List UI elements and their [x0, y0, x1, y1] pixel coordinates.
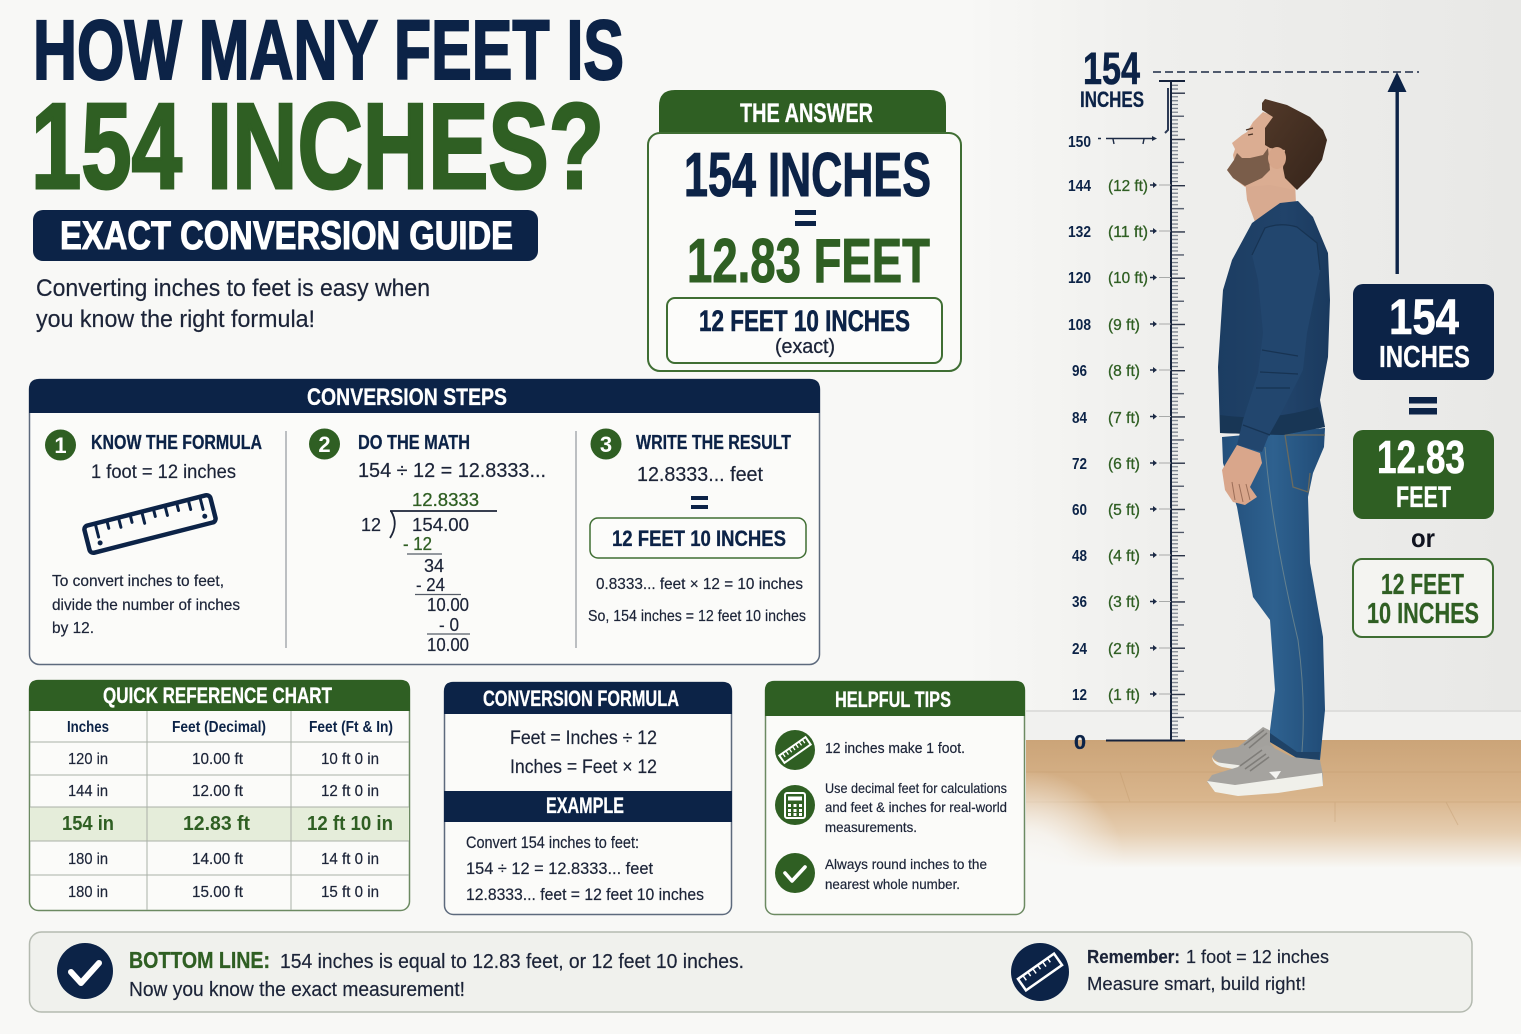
beard	[1227, 148, 1270, 186]
table rows: 10 ft 0 in	[321, 751, 379, 768]
long division: 10.00	[427, 634, 469, 655]
table rows: 144 in	[68, 783, 108, 800]
scale marks: (10 ft)	[1108, 270, 1148, 287]
callout: 12.83 feet: FEET	[1396, 481, 1451, 514]
scale marks: (1 ft)	[1108, 687, 1140, 704]
long division: 12.8333	[412, 489, 479, 510]
steps header	[29, 379, 820, 413]
scale marks	[1068, 178, 1171, 704]
sleeve	[1237, 225, 1320, 452]
scale marks: (8 ft)	[1108, 363, 1140, 380]
bottom line text: Now you know the exact measurement!	[129, 979, 465, 1001]
scale marks: (4 ft)	[1108, 548, 1140, 565]
step 2 badge: 2	[318, 432, 331, 457]
scale marks: (7 ft)	[1108, 410, 1140, 427]
long division: - 12	[403, 533, 432, 554]
long division: 154.00	[412, 514, 469, 535]
table rows: 14 ft 0 in	[321, 851, 379, 868]
eye and nose detail	[1246, 128, 1253, 135]
panel: bottom line	[30, 932, 1472, 1012]
remember text	[1087, 946, 1329, 994]
column headers: Inches	[67, 719, 109, 736]
scale marks: 108	[1068, 317, 1091, 334]
tip 2: measurements.	[825, 819, 917, 835]
step 3 result box	[590, 518, 806, 558]
long division: - 24	[416, 574, 445, 595]
icon: calculator	[775, 785, 815, 825]
scale marks: 120	[1068, 270, 1091, 287]
table rows: 180 in	[68, 884, 108, 901]
highlighted values: 154 in	[62, 813, 114, 835]
column headers: Feet (Ft & In)	[309, 719, 393, 736]
step 1 explanation: by 12.	[52, 620, 94, 637]
or label: or	[1411, 523, 1435, 553]
icon: ruler	[775, 730, 815, 770]
tip 3: nearest whole number.	[825, 876, 960, 892]
step 3 note	[588, 576, 806, 625]
hair	[1262, 99, 1327, 190]
step 3 title: WRITE THE RESULT	[636, 431, 791, 454]
icon: check badge	[57, 943, 113, 999]
top label 154 inches	[1080, 43, 1144, 112]
step 1 badge	[45, 430, 76, 460]
scale marks: 96	[1072, 363, 1087, 380]
callout: 12.83 feet: 12.83	[1377, 431, 1465, 483]
exact box	[667, 298, 942, 363]
scale marks: (5 ft)	[1108, 502, 1140, 519]
example text: 12.8333... feet = 12 feet 10 inches	[466, 886, 704, 904]
tip 1: 12 inches make 1 foot.	[825, 741, 965, 757]
scale marks: 24	[1072, 641, 1087, 658]
example text: Convert 154 inches to feet:	[466, 834, 639, 852]
step 1 title: KNOW THE FORMULA	[91, 431, 262, 454]
tip 3	[825, 856, 987, 892]
long division	[361, 489, 497, 655]
panel: helpful tips	[765, 681, 1025, 914]
answer heading: THE ANSWER	[740, 98, 873, 128]
tips header	[765, 681, 1025, 716]
column headers: Feet (Decimal)	[172, 719, 266, 736]
answer inches: 154 INCHES	[684, 141, 931, 210]
intro text: Converting inches to feet is easy when	[36, 275, 430, 302]
tips heading: HELPFUL TIPS	[835, 687, 951, 712]
formulas: Inches = Feet × 12	[510, 757, 657, 778]
equals sign	[691, 496, 708, 509]
formula heading: CONVERSION FORMULA	[483, 686, 679, 711]
step 1 explanation	[52, 573, 240, 637]
formulas: Feet = Inches ÷ 12	[510, 728, 657, 749]
scale marks: 72	[1072, 456, 1087, 473]
table rows: 14.00 ft	[192, 851, 244, 868]
icon: ruler badge	[1011, 943, 1069, 1001]
front shoe	[1207, 745, 1323, 796]
tip 2	[825, 780, 1007, 835]
tip 3: Always round inches to the	[825, 856, 987, 872]
icon: ruler	[84, 494, 216, 554]
title	[31, 3, 624, 214]
step 1	[45, 430, 262, 637]
panel: the answer	[648, 90, 961, 371]
scale marks: (11 ft)	[1108, 224, 1148, 241]
icon: check	[775, 853, 815, 893]
jeans hem	[1270, 733, 1320, 760]
step 3 badge: 3	[600, 432, 612, 457]
table rows: 120 in	[68, 751, 108, 768]
callout: 12 feet 10 inches	[1353, 559, 1493, 637]
neck	[1245, 170, 1296, 222]
step 1 explanation: To convert inches to feet,	[52, 573, 224, 590]
jeans details	[1265, 447, 1303, 752]
step 2 title: DO THE MATH	[358, 431, 470, 454]
top label 154 inches: INCHES	[1080, 87, 1144, 112]
steps heading: CONVERSION STEPS	[307, 384, 507, 411]
154 dashed height line	[1153, 71, 1419, 73]
top label 154 inches: 154	[1083, 43, 1140, 94]
scale marks: 36	[1072, 594, 1087, 611]
callout: 154 inches	[1353, 284, 1494, 380]
scale marks: 132	[1068, 224, 1091, 241]
height ruler	[1068, 43, 1419, 754]
answer box	[648, 133, 961, 371]
step 1 formula: 1 foot = 12 inches	[91, 461, 236, 483]
chart heading: QUICK REFERENCE CHART	[103, 683, 332, 708]
intro text: you know the right formula!	[36, 306, 315, 333]
title line 2: 154 INCHES?	[31, 78, 604, 214]
exact box: (exact)	[775, 336, 835, 358]
scale marks: (3 ft)	[1108, 594, 1140, 611]
scale marks: 60	[1072, 502, 1087, 519]
panel: quick reference chart	[29, 680, 410, 910]
highlighted row	[30, 807, 409, 841]
example band	[444, 791, 732, 822]
step 3 badge	[590, 428, 622, 460]
step 2	[309, 428, 546, 655]
table rows: 12 ft 0 in	[321, 783, 379, 800]
example band: EXAMPLE	[546, 793, 624, 818]
hand	[1222, 445, 1262, 505]
intro text	[36, 275, 430, 333]
head	[1227, 112, 1298, 190]
step 3 note: So, 154 inches = 12 feet 10 inches	[588, 608, 806, 625]
panel: conversion formula	[444, 682, 732, 914]
bottom line text: 154 inches is equal to 12.83 feet, or 12 feet 10 inches.	[280, 951, 744, 973]
scale marks: 48	[1072, 548, 1087, 565]
table rows: 12.00 ft	[192, 783, 244, 800]
column headers	[67, 719, 393, 736]
formula header	[444, 682, 732, 714]
scale marks: (12 ft)	[1108, 178, 1148, 195]
step 1 explanation: divide the number of inches	[52, 597, 240, 614]
highlighted values: 12.83 ft	[183, 813, 250, 835]
equals sign	[1409, 397, 1437, 414]
illustration: standing man in profile	[1207, 99, 1330, 796]
step 3	[588, 428, 806, 625]
height arrow	[1388, 72, 1406, 274]
long division: 10.00	[427, 594, 469, 615]
step 3 decimal: 12.8333... feet	[637, 464, 763, 486]
marker 150: 150	[1068, 134, 1091, 151]
chart header	[29, 680, 410, 711]
scale marks: 84	[1072, 410, 1087, 427]
callout: 154 inches: INCHES	[1379, 339, 1470, 374]
table rows: 15 ft 0 in	[321, 884, 379, 901]
bottom line label: BOTTOM LINE:	[129, 947, 270, 973]
remember text: Measure smart, build right!	[1087, 973, 1306, 994]
title line 1: HOW MANY FEET IS	[33, 3, 624, 97]
table rows: 15.00 ft	[192, 884, 244, 901]
bottom line text	[129, 951, 744, 1001]
subtitle banner: EXACT CONVERSION GUIDE	[60, 214, 513, 258]
scale marks: (2 ft)	[1108, 641, 1140, 658]
ruler spine	[1106, 81, 1185, 740]
scale marks: (6 ft)	[1108, 456, 1140, 473]
callout: 154 inches: 154	[1389, 289, 1459, 345]
wall, baseboard and wood floor	[960, 0, 1521, 870]
long division: 34	[424, 555, 444, 576]
example text: 154 ÷ 12 = 12.8333... feet	[466, 860, 653, 878]
step 2 badge	[309, 428, 340, 460]
tip 2: and feet & inches for real-world	[825, 799, 1007, 815]
answer feet: 12.83 FEET	[687, 227, 930, 296]
sweater hem	[1220, 407, 1325, 435]
ear	[1268, 147, 1286, 169]
table rows: 10.00 ft	[192, 751, 244, 768]
scale marks: 12	[1072, 687, 1087, 704]
marker 150	[1068, 88, 1168, 151]
highlighted values: 12 ft 10 in	[307, 813, 393, 835]
step 3 result box: 12 FEET 10 INCHES	[612, 526, 786, 551]
zero label: 0	[1074, 732, 1086, 754]
jeans	[1222, 428, 1325, 760]
callout: 12 feet 10 inches: 12 FEET	[1381, 569, 1464, 601]
scale marks: (9 ft)	[1108, 317, 1140, 334]
back shoe	[1212, 727, 1285, 771]
answer tab	[659, 90, 946, 136]
highlighted values	[62, 813, 393, 835]
long division: - 0	[439, 614, 459, 635]
callout: 12.83 feet	[1353, 430, 1494, 519]
remember text: Remember:	[1087, 946, 1180, 967]
tip 2: Use decimal feet for calculations	[825, 780, 1007, 796]
panel: conversion steps	[29, 379, 820, 664]
step 3 note: 0.8333... feet × 12 = 10 inches	[596, 576, 803, 593]
table rows	[68, 751, 379, 901]
exact box: 12 FEET 10 INCHES	[699, 305, 910, 338]
table rows: 180 in	[68, 851, 108, 868]
long division: 12	[361, 514, 381, 535]
equals sign	[795, 210, 816, 226]
callout: 12 feet 10 inches: 10 INCHES	[1367, 598, 1479, 630]
sweater	[1218, 201, 1330, 435]
ruler ticks	[1172, 81, 1186, 740]
remember text: 1 foot = 12 inches	[1186, 946, 1329, 967]
step 2 equation: 154 ÷ 12 = 12.8333...	[358, 460, 546, 482]
formulas	[510, 728, 657, 778]
step 1 badge: 1	[54, 433, 67, 458]
example text	[466, 834, 704, 904]
scale marks: 144	[1068, 178, 1091, 195]
